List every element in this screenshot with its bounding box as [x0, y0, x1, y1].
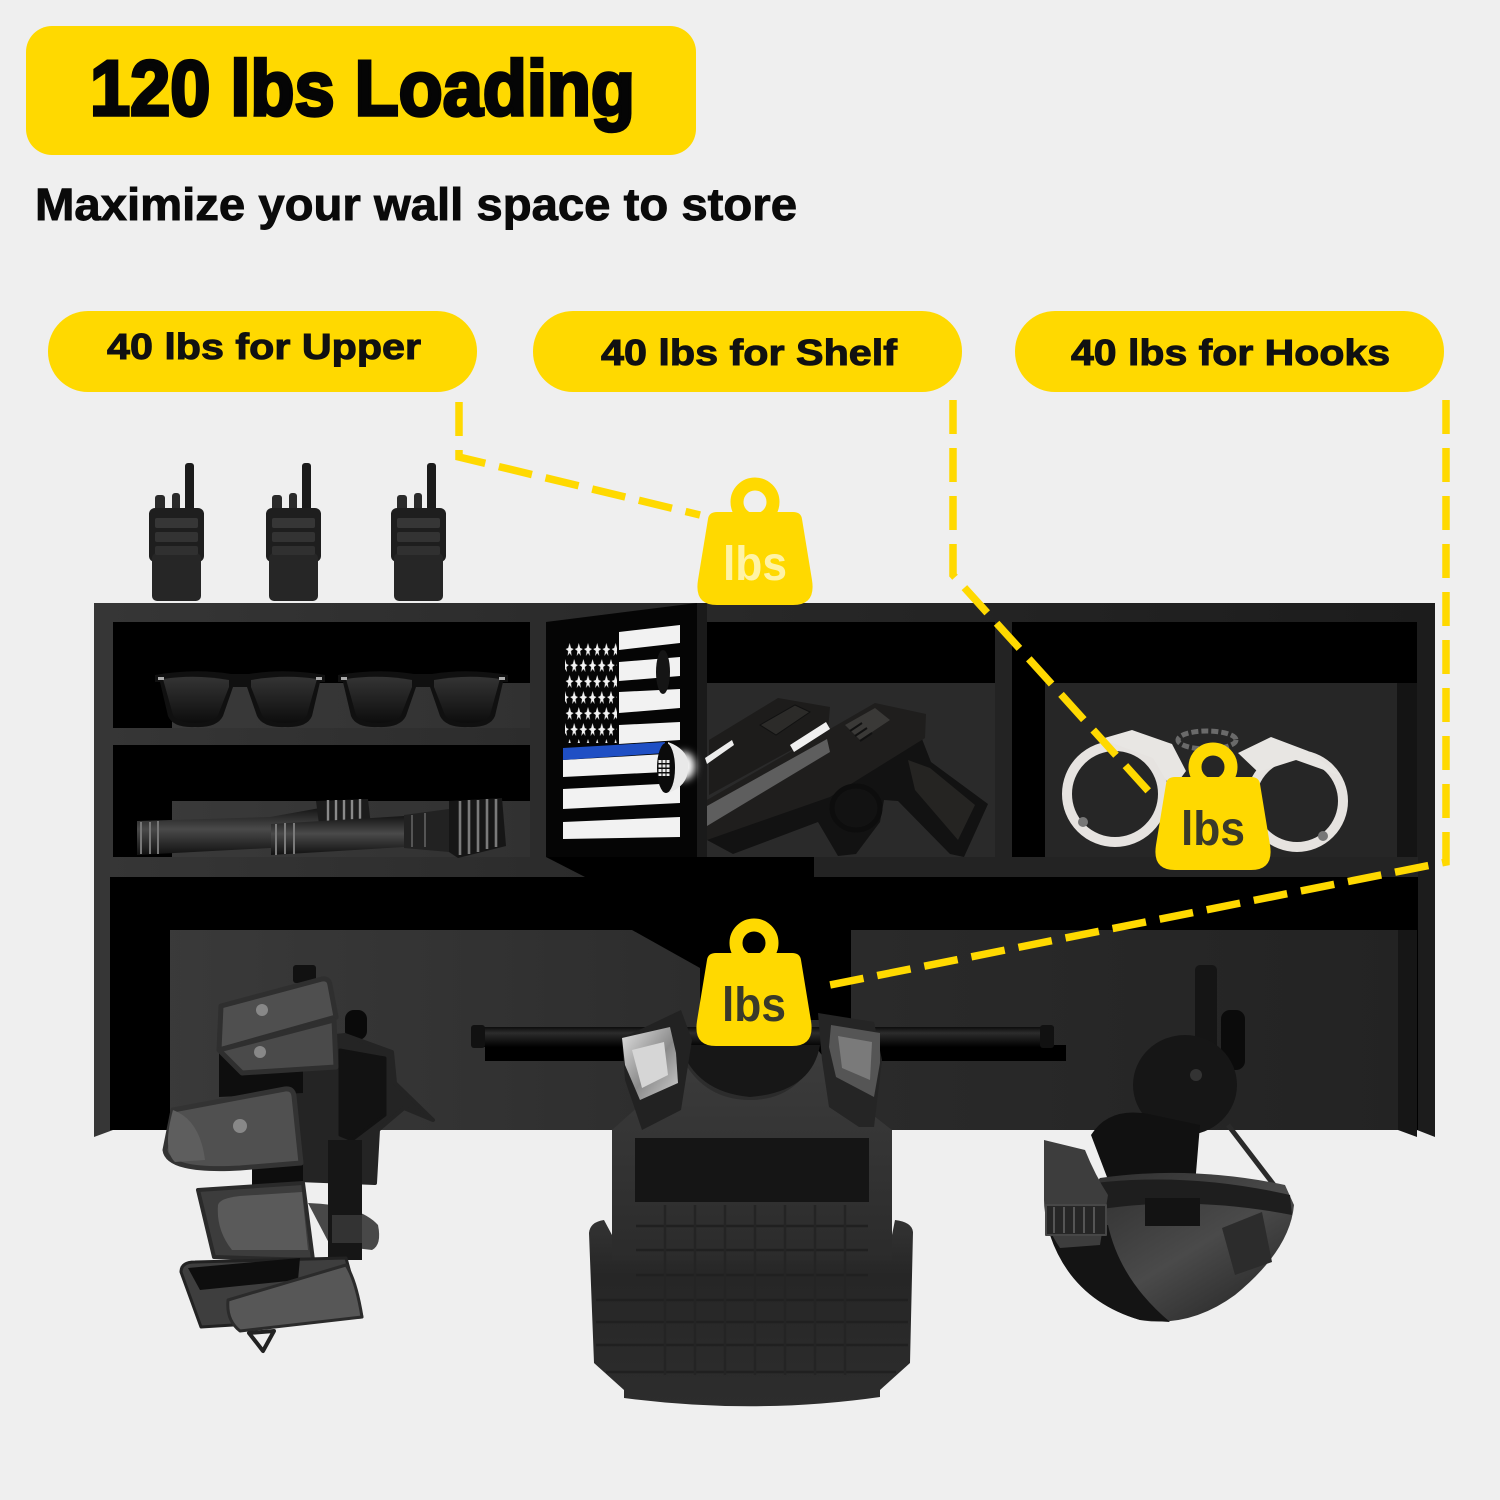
molle webbing [596, 1205, 908, 1375]
weight icon: hooks [696, 925, 812, 1046]
flashlights [137, 798, 506, 858]
lower compartment [110, 857, 1418, 1137]
pistols [705, 698, 988, 857]
front flashlight [271, 798, 506, 858]
weight icon: upper [697, 484, 813, 605]
label: 40 lbs for Upper [48, 311, 477, 392]
tactical vest [589, 1010, 913, 1406]
right compartment [1012, 622, 1417, 857]
keypad dial [657, 742, 695, 793]
weight icon: hooks: lbs [722, 979, 786, 1032]
dashed leader: shelf [953, 400, 1152, 795]
label: 40 lbs for Upper: 40 lbs for Upper [107, 326, 421, 367]
lower-left compartment [113, 745, 530, 857]
right buckle [818, 1013, 882, 1127]
dashed leader: hooks [825, 400, 1446, 986]
rear pistol [705, 698, 830, 795]
holster [298, 1035, 433, 1183]
upper-left compartment [113, 622, 530, 728]
duty belt with pouches [165, 965, 433, 1351]
pouch four [198, 1183, 313, 1260]
front pistol [707, 703, 988, 857]
neck opening [680, 1045, 820, 1097]
label: 40 lbs for Hooks [1015, 311, 1444, 392]
shelf edge [814, 857, 1418, 877]
wall cabinet [94, 603, 1435, 1137]
helmet [1044, 965, 1294, 1322]
middle compartment [707, 622, 995, 857]
flag blue line [563, 742, 665, 760]
sunglasses [155, 671, 508, 727]
weight icon: shelf: lbs [1181, 803, 1245, 856]
label: 40 lbs for Shelf [533, 311, 962, 392]
flag stars [565, 642, 617, 743]
id patch [635, 1138, 869, 1202]
weight icon: shelf [1155, 749, 1271, 870]
pouch five [181, 1258, 362, 1327]
hanging rod [471, 1025, 1066, 1061]
dashed leader: upper [459, 402, 700, 515]
safe knob [656, 650, 670, 694]
left buckle [622, 1010, 692, 1130]
label: 40 lbs for Hooks: 40 lbs for Hooks [1071, 332, 1390, 373]
subtitle: Maximize your wall space to store [35, 179, 797, 230]
handcuffs [1067, 730, 1343, 847]
pouch two [219, 1020, 336, 1073]
flag stripes [563, 625, 680, 839]
weight icon: upper: lbs [723, 538, 787, 591]
icon: three walkie-talkies on top [149, 463, 446, 601]
title badge [26, 26, 696, 155]
safe door with thin blue line flag [546, 603, 707, 857]
pouch three [165, 1089, 301, 1169]
pouch one [219, 979, 336, 1050]
title badge: 120 lbs Loading [90, 44, 635, 132]
vest front panel [612, 1050, 892, 1260]
rear flashlight [137, 799, 371, 855]
label: 40 lbs for Shelf: 40 lbs for Shelf [601, 332, 898, 373]
vest side wings [589, 1220, 913, 1406]
